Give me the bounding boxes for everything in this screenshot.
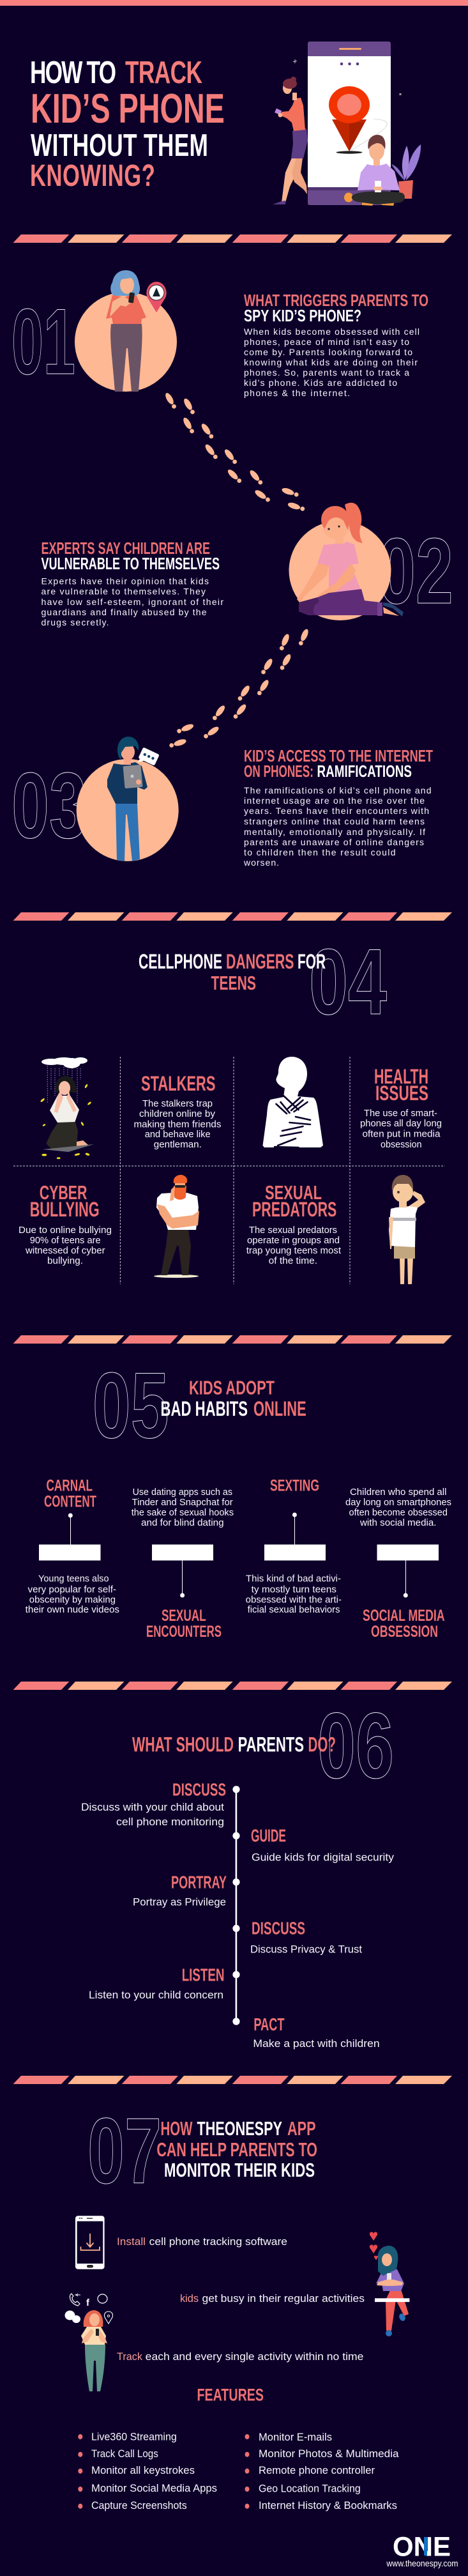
- heading: MONITOR THEIR KIDS: [164, 2159, 315, 2181]
- listen: LISTEN: [182, 1965, 225, 1985]
- sexting: This kind of bad activi-: [246, 1574, 341, 1584]
- heading: WHAT SHOULD: [132, 1733, 234, 1756]
- features list: left column: Monitor Social Media Apps: [91, 2482, 217, 2494]
- social media obsession: Children who spend all: [350, 1487, 446, 1498]
- number 07: 07: [87, 2099, 162, 2203]
- text block: kid’s phone. Kids are addicted to: [244, 378, 397, 388]
- stalkers: [134, 1072, 221, 1150]
- discuss: cell phone monitoring: [116, 1816, 224, 1828]
- sexting: ty mostly turn teens: [252, 1584, 336, 1595]
- sexual encounters: ENCOUNTERS: [146, 1623, 222, 1641]
- sexting: ficial sexual behaviors: [248, 1604, 340, 1615]
- silhouette with hands illustration: [263, 1057, 323, 1147]
- text block: The ramifications of kid’s cell phone and: [244, 785, 432, 795]
- timeline: [232, 1786, 240, 2025]
- logo: www.theonespy.com: [386, 2559, 458, 2568]
- portray: Portray as Privilege: [133, 1896, 226, 1908]
- heading: [41, 539, 220, 573]
- install text: Install: [117, 2235, 146, 2248]
- text block: phones & the internet.: [244, 388, 350, 398]
- number 03: 03: [11, 753, 87, 857]
- health issues: HEALTH: [374, 1065, 428, 1088]
- pact: Make a pact with children: [253, 2037, 380, 2050]
- text block: have low self-esteem, ignorant of their: [41, 597, 223, 607]
- icon: location pin: [329, 86, 387, 154]
- divider: [13, 1682, 452, 1690]
- heading: RAMIFICATIONS: [317, 762, 412, 781]
- kids text: get busy in their regular activities: [202, 2292, 365, 2304]
- kids text: kids: [180, 2292, 199, 2304]
- sad boy illustration: [389, 1175, 425, 1284]
- cyber bullying: [19, 1181, 112, 1266]
- text block: years. Teens have their encounters with: [244, 806, 429, 816]
- health issues: [360, 1065, 442, 1150]
- heading: ONLINE: [253, 1397, 306, 1420]
- sexual predators: PREDATORS: [252, 1198, 336, 1221]
- features list: left column: [78, 2430, 217, 2511]
- text block: parents are unaware of online dangers: [244, 837, 424, 847]
- woman with blue hair: [106, 270, 146, 392]
- text block: mentally, emotionally and physically. If: [244, 827, 425, 837]
- features list: right column: Geo Location Tracking: [259, 2483, 361, 2495]
- text block: [243, 785, 432, 868]
- discuss privacy: [250, 1919, 362, 1956]
- title: TRACK: [125, 55, 202, 90]
- sexual predators: The sexual predators: [249, 1225, 337, 1236]
- title: WITHOUT THEM: [31, 128, 208, 163]
- text block: are vulnerable to themselves. They: [41, 586, 206, 597]
- health issues: obsession: [381, 1139, 422, 1150]
- sexual encounters: the sake of sexual hooks: [132, 1507, 234, 1518]
- sexual encounters: Use dating apps such as: [133, 1487, 232, 1498]
- heading: PARENTS: [238, 1733, 304, 1756]
- text block: internet usage are on the rise over the: [244, 795, 425, 806]
- heading: CAN HELP PARENTS TO: [156, 2138, 317, 2161]
- social media obsession: [345, 1487, 451, 1641]
- sexting: obsessed with the arti-: [246, 1595, 342, 1606]
- cyber bullying: witnessed of cyber: [25, 1245, 105, 1256]
- divider: [13, 1335, 452, 1344]
- sexual predators: SEXUAL: [265, 1181, 322, 1204]
- discuss: Discuss with your child about: [81, 1801, 224, 1813]
- text block: drugs secretly.: [41, 617, 109, 627]
- panel: section 07 app: [65, 2099, 458, 2568]
- number 04: 04: [309, 930, 387, 1034]
- features list: left column: Live360 Streaming: [91, 2430, 177, 2442]
- icon: speech bubble: [137, 747, 160, 769]
- carnal content: CONTENT: [44, 1493, 96, 1511]
- features list: right column: Monitor E-mails: [259, 2431, 332, 2443]
- heading: TEENS: [211, 972, 256, 994]
- panel: section 01: [11, 270, 428, 398]
- logo: ONE: [393, 2532, 451, 2563]
- text block: come by. Parents looking forward to: [244, 347, 412, 357]
- social media obsession: often become obsessed: [349, 1507, 448, 1518]
- stalkers: and behave like: [145, 1129, 211, 1140]
- cyber bullying: BULLYING: [30, 1198, 100, 1221]
- text block: knowing what kids are doing on their: [244, 357, 418, 367]
- top bar: [0, 0, 468, 6]
- woman looking at phone: [273, 77, 308, 204]
- discuss: [81, 1779, 226, 1828]
- number 05: 05: [93, 1353, 169, 1457]
- stalkers: gentleman.: [154, 1139, 202, 1150]
- heading: ON PHONES:: [244, 762, 313, 781]
- number 06: 06: [317, 1693, 394, 1798]
- heading: THEONESPY: [197, 2117, 282, 2140]
- panel: section 04 cellphone dangers: [13, 930, 444, 1284]
- heading: APP: [287, 2117, 316, 2140]
- heading: [244, 291, 428, 325]
- social media obsession: with social media.: [359, 1517, 437, 1528]
- health issues: often put in media: [363, 1128, 441, 1140]
- listen: Listen to your child concern: [89, 1989, 223, 2001]
- icon: large phone: [308, 42, 391, 205]
- heading: [244, 746, 433, 781]
- text block: phones. So, parents want to track a: [244, 367, 409, 378]
- title: HOW TO: [30, 55, 116, 90]
- social media obsession: day long on smartphones: [345, 1497, 451, 1508]
- icon: app location pin: [146, 282, 167, 312]
- carnal content: obscenity by making: [29, 1595, 116, 1606]
- text block: When kids become obsessed with cell: [244, 326, 419, 337]
- logo: [386, 2532, 458, 2568]
- discuss: DISCUSS: [172, 1779, 226, 1799]
- icons: social apps: f: [86, 2297, 90, 2308]
- pact: [253, 2014, 380, 2050]
- portray: [133, 1873, 227, 1908]
- sexual encounters: [132, 1487, 234, 1641]
- crying woman illustration: [40, 1057, 94, 1159]
- cyber bullying: Due to online bullying: [19, 1225, 112, 1236]
- heading: HOW: [161, 2117, 193, 2140]
- listen: [89, 1965, 225, 2001]
- circle backdrop: [75, 292, 177, 392]
- features list: left column: Track Call Logs: [91, 2448, 158, 2460]
- features list: right column: Remote phone controller: [259, 2464, 375, 2476]
- track text: Track: [117, 2350, 142, 2363]
- carnal content: their own nude videos: [26, 1604, 119, 1615]
- panel: section 06 what should parents do: [81, 1693, 394, 2050]
- install text: cell phone tracking software: [149, 2235, 287, 2248]
- heading: FOR: [298, 950, 326, 973]
- footprints path 1: [164, 392, 305, 512]
- sexual predators: operate in groups and: [247, 1235, 340, 1246]
- bearded man illustration: [154, 1175, 199, 1278]
- title: KID’S PHONE: [31, 86, 225, 132]
- icon: phone download: [75, 2216, 105, 2269]
- text block: strangers online that could harm teens: [244, 816, 425, 827]
- text block: [41, 576, 223, 627]
- portray: PORTRAY: [171, 1873, 227, 1892]
- guide: GUIDE: [251, 1826, 286, 1846]
- sexual encounters: SEXUAL: [162, 1607, 206, 1625]
- stalkers: The stalkers trap: [142, 1098, 213, 1109]
- stalkers: making them friends: [134, 1119, 221, 1130]
- heading: DO?: [308, 1733, 336, 1756]
- heading: [156, 2117, 317, 2181]
- discuss privacy: Discuss Privacy & Trust: [250, 1943, 362, 1956]
- guide: Guide kids for digital security: [252, 1851, 394, 1864]
- stalkers: children online by: [139, 1108, 216, 1119]
- cyber bullying: 90% of teens are: [30, 1235, 101, 1246]
- heading: [161, 1376, 306, 1420]
- health issues: The use of smart-: [364, 1108, 437, 1119]
- icons: social apps: [65, 2294, 113, 2324]
- text block: worsen.: [243, 857, 279, 868]
- heading: VULNERABLE TO THEMSELVES: [41, 554, 220, 573]
- woman with phone illustration: [81, 2310, 107, 2391]
- health issues: phones all day long: [360, 1118, 442, 1129]
- sexual encounters: and for blind dating: [141, 1517, 224, 1528]
- stalkers: STALKERS: [141, 1072, 216, 1095]
- sexual encounters: Tinder and Snapchat for: [132, 1497, 233, 1508]
- icon: hearts: [370, 2232, 378, 2260]
- girl on bench illustration: [370, 2232, 409, 2336]
- text block: guardians and finally abused by the: [41, 607, 207, 617]
- features list: right column: Internet History & Bookmarks: [259, 2499, 397, 2511]
- social media obsession: OBSESSION: [371, 1623, 438, 1641]
- features list: left column: Monitor all keystrokes: [91, 2464, 195, 2476]
- text block: Experts have their opinion that kids: [41, 576, 209, 586]
- text block: [244, 326, 419, 398]
- icon: sparkles: [293, 59, 401, 95]
- text block: phones, peace of mind isn’t easy to: [244, 337, 409, 347]
- divider: [13, 234, 452, 243]
- carnal content: [26, 1477, 119, 1615]
- text block: to children then the result could: [244, 847, 396, 857]
- girl sitting with ponytail: [297, 503, 404, 617]
- carnal content: Young teens also: [38, 1574, 109, 1584]
- sexual predators: trap young teens most: [246, 1245, 342, 1256]
- heading: SPY KID’S PHONE?: [244, 306, 361, 325]
- health issues: ISSUES: [375, 1082, 428, 1105]
- circle backdrop: [77, 759, 179, 861]
- heading: EXPERTS SAY CHILDREN ARE: [41, 539, 210, 558]
- carnal content: CARNAL: [46, 1477, 93, 1495]
- sexting: [246, 1477, 342, 1615]
- hero illustration: phone with location pin, woman and boy: [273, 42, 421, 206]
- cyber bullying: bullying.: [47, 1255, 83, 1266]
- title: [30, 55, 225, 192]
- boy sitting with phone: [344, 135, 405, 206]
- divider: [13, 912, 452, 921]
- sexting: SEXTING: [270, 1477, 319, 1495]
- panel: section 05 bad habits: [26, 1353, 451, 1641]
- sexual predators: of the time.: [269, 1255, 317, 1266]
- circle backdrop: [289, 521, 391, 620]
- footprints path 2: [169, 628, 310, 749]
- discuss privacy: DISCUSS: [252, 1919, 305, 1938]
- heading: KIDS ADOPT: [189, 1376, 275, 1399]
- guide: [251, 1826, 394, 1864]
- pact: PACT: [253, 2014, 285, 2034]
- title: KNOWING?: [30, 158, 155, 192]
- heading: CELLPHONE: [139, 950, 222, 973]
- plant: [391, 144, 421, 199]
- carnal content: very popular for self-: [28, 1584, 116, 1595]
- features list: left column: Capture Screenshots: [91, 2499, 187, 2511]
- sexual predators: [246, 1181, 342, 1266]
- heading: DANGERS: [226, 950, 294, 973]
- number 01: 01: [11, 289, 75, 394]
- heading: [139, 950, 326, 994]
- divider: [13, 2076, 452, 2084]
- features list: right column: [245, 2431, 399, 2511]
- panel: section 02: [41, 503, 453, 627]
- panel: section 03: [11, 737, 433, 868]
- features heading: FEATURES: [197, 2386, 264, 2405]
- cyber bullying: CYBER: [40, 1181, 87, 1204]
- track text: each and every single activity within no time: [146, 2350, 363, 2363]
- heading: BAD HABITS: [161, 1397, 248, 1420]
- features list: right column: Monitor Photos & Multimedia: [259, 2448, 399, 2460]
- man with tablet: [107, 737, 147, 861]
